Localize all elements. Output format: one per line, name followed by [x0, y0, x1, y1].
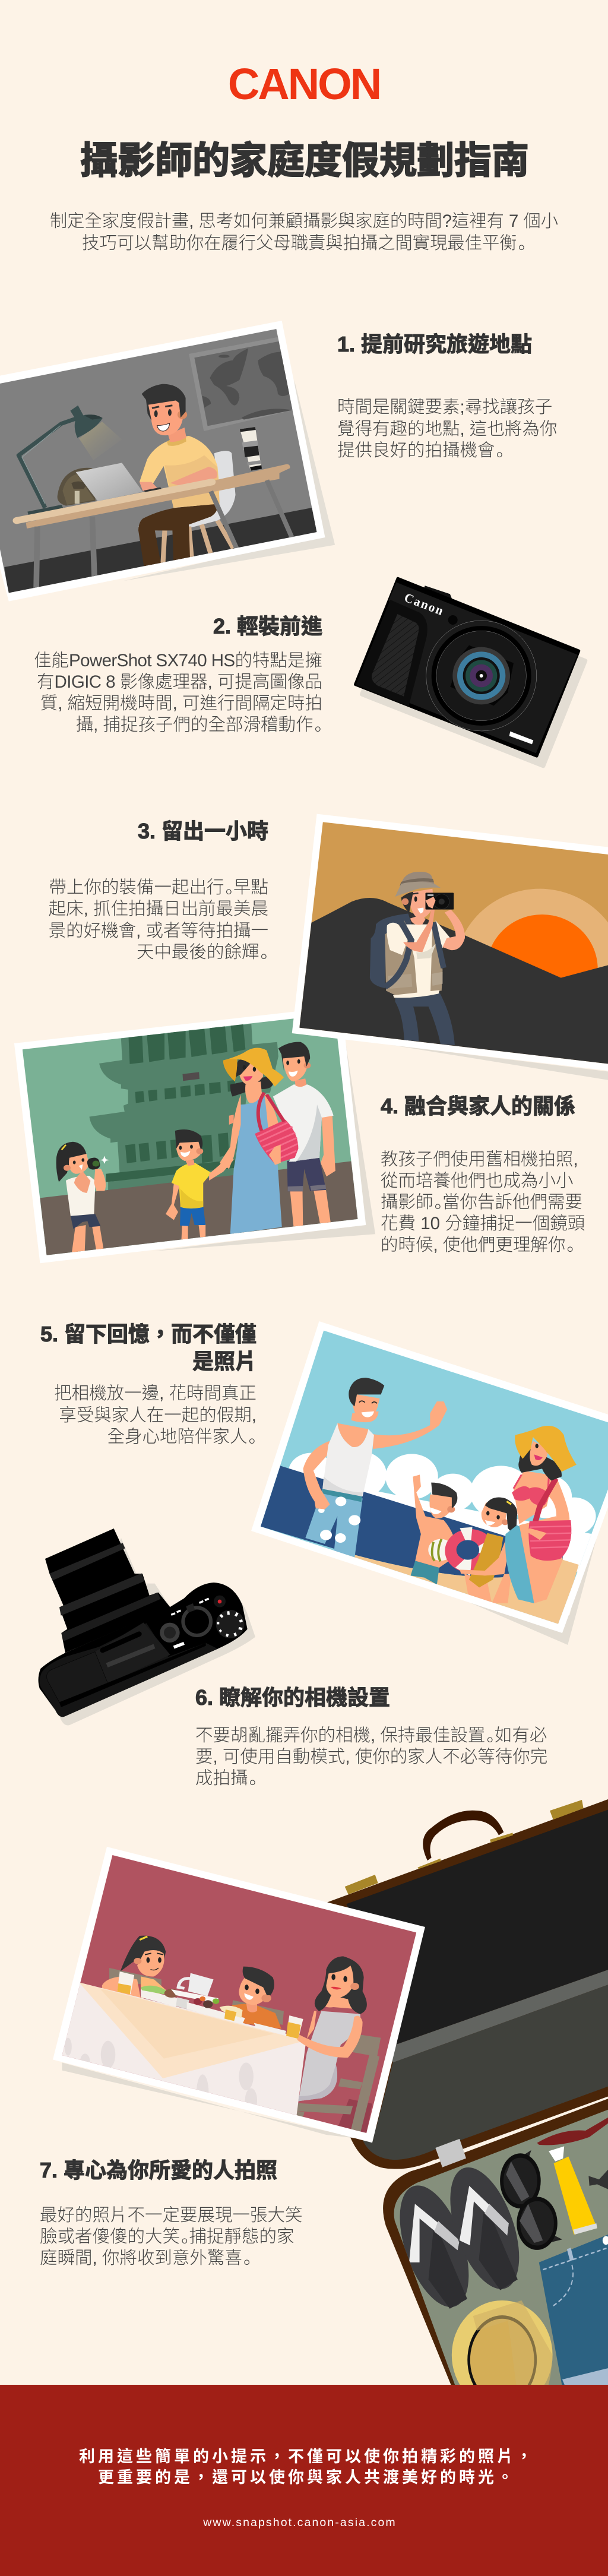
intro text: 技巧可以幫助你在履行父母職責與拍攝之間實現最佳平衡。 [82, 233, 522, 258]
suitcase latches [345, 1800, 584, 1894]
footer message [79, 2448, 535, 2486]
sun [464, 888, 608, 978]
footer message: 利用這些簡單的小提示，不僅可以使你拍精彩的照片， [79, 2448, 535, 2466]
intro text: 制定全家度假計畫, 思考如何兼顧攝影與家庭的時間?這裡有 7 個小 [50, 211, 558, 231]
step 5 text: 享受與家人在一起的假期, [59, 1405, 256, 1425]
intro text [50, 211, 558, 258]
step 4 text: 從而培養他們也成為小小 [381, 1171, 574, 1191]
girl at table [102, 1936, 167, 1999]
father waving [303, 1378, 447, 1558]
step 7 text: 庭瞬間, 你將收到意外驚喜。 [40, 2248, 247, 2273]
step 3 text: 天中最後的餘輝。 [137, 942, 264, 967]
jeans [539, 2235, 608, 2387]
sunglasses [502, 2150, 562, 2248]
chair [138, 451, 236, 563]
step 1 text: 時間是關鍵要素;尋找讓孩子 [337, 397, 552, 417]
step 7 text [40, 2205, 303, 2273]
mother at table [297, 1956, 367, 2101]
step 2 text: 佳能PowerShot SX740 HS的特點是擁 [34, 651, 322, 670]
scarf strap [537, 2118, 608, 2145]
camera dial [216, 1610, 245, 1638]
step 1 text [337, 397, 557, 466]
laptop [76, 463, 162, 501]
suitcase handle [423, 1811, 504, 1860]
step 3 text: 景的好機會, 或者等待拍攝一 [49, 921, 268, 941]
step 4 text: 花費 10 分鐘捕捉一個鏡頭 [381, 1214, 585, 1233]
swim ring [445, 1527, 487, 1576]
step 5 text: 全身心地陪伴家人。 [107, 1427, 252, 1452]
step 2 text: 質, 縮短開機時間, 可進行間隔定時拍 [40, 694, 322, 713]
desk [17, 464, 292, 590]
step 7 text: 最好的照片不一定要展現一張大笑 [40, 2205, 303, 2225]
step 1 heading: 1. 提前研究旅遊地點 [337, 332, 532, 356]
step 3 heading: 3. 留出一小時 [138, 819, 268, 843]
step 5 heading: 是照片 [192, 1349, 256, 1374]
desk lamp [18, 406, 122, 515]
step 5 text [54, 1384, 256, 1452]
straw hat [451, 2300, 553, 2385]
step 5 heading: 5. 留下回憶，而不僅僅 [40, 1322, 256, 1346]
open suitcase: lower tray with packed items [383, 2094, 608, 2411]
camera grip [372, 614, 419, 697]
camera brand: Canon [403, 590, 445, 618]
step 6 heading: 6. 瞭解你的相機設置 [195, 1685, 390, 1710]
camera lens [426, 621, 537, 731]
mountains [291, 898, 608, 1075]
step 6 text: 成拍攝。 [195, 1768, 253, 1793]
footer band [0, 2385, 608, 2576]
step 2 heading: 2. 輕裝前進 [213, 614, 322, 638]
photo 3: photographer at sunrise [291, 814, 608, 1082]
footer message: 更重要的是，還可以使你與家人共渡美好的時光。 [98, 2469, 516, 2486]
step 1 text: 提供良好的拍攝機會。 [337, 441, 500, 466]
photographer [370, 872, 465, 1045]
step 1 text: 覺得有趣的地點, 這也將為你 [337, 419, 557, 438]
boy at table [232, 1967, 284, 2029]
step 4 heading: 4. 融合與家人的關係 [381, 1094, 575, 1118]
table cloth [62, 1982, 306, 2115]
step 5 heading [40, 1322, 256, 1374]
step 4 text: 的時候, 使他們更理解你。 [381, 1235, 571, 1260]
step 6 text: 要, 可使用自動模式, 使你的家人不必等待你完 [195, 1747, 547, 1767]
lens on desk [240, 427, 262, 471]
camera bag [58, 468, 96, 506]
photo 7: family dinner [48, 1845, 435, 2143]
step 2 text: 攝, 捕捉孩子們的全部滑稽動作。 [76, 715, 318, 740]
mother with towel and bag [505, 1426, 577, 1603]
mother with hat and bag [220, 1048, 298, 1234]
wall map [189, 336, 299, 431]
logo: CANON: CANON [228, 59, 380, 109]
step 6 text: 不要胡亂擺弄你的相機, 保持最佳設置。如有必 [195, 1726, 547, 1751]
step 4 text: 攝影師。當你告訴他們需要 [381, 1192, 582, 1217]
footer url: www.snapshot.canon-asia.com [203, 2516, 397, 2529]
dining chair [296, 2033, 381, 2134]
temple [89, 1024, 278, 1191]
plug [588, 2170, 608, 2189]
food and jug [141, 1973, 303, 2039]
man at laptop [138, 384, 220, 566]
compact camera, front view [355, 578, 585, 766]
step 2 text [34, 651, 322, 740]
step 6 text [195, 1726, 547, 1793]
boy with ball [411, 1474, 457, 1584]
step 4 text: 教孩子們使用舊相機拍照, [381, 1150, 578, 1169]
flip-flops [400, 2167, 519, 2309]
step 3 text: 起床, 抓住拍攝日出前最美晨 [49, 899, 268, 919]
step 2 text: 有DIGIC 8 影像處理器, 可提高圖像品 [37, 672, 322, 692]
open suitcase: lid [327, 1799, 608, 2170]
sunscreen tube [549, 2146, 597, 2235]
boy in yellow shirt [166, 1129, 234, 1240]
step 3 text [49, 878, 268, 967]
step 4 text [381, 1150, 585, 1260]
sea [261, 1466, 563, 1578]
step 7 text: 臉或者傻傻的大笑。捕捉靜態的家 [40, 2227, 294, 2252]
girl [460, 1498, 517, 1603]
table top [79, 1982, 305, 2078]
sand [341, 1555, 579, 1627]
father [273, 1042, 335, 1227]
step 3 text: 帶上你的裝備一起出行。早點 [49, 878, 268, 903]
clouds [277, 1451, 596, 1575]
step 5 text: 把相機放一邊, 花時間真正 [54, 1384, 256, 1403]
girl with camera [56, 1142, 109, 1253]
photo 4: family sightseeing at temple [12, 1007, 375, 1267]
step 7 heading: 7. 專心為你所愛的人拍照 [40, 2158, 277, 2182]
compact camera, top view [39, 1528, 255, 1726]
title: 攝影師的家庭度假規劃指南 [80, 140, 529, 182]
photo 1: man planning trip at desk [0, 321, 335, 602]
photo 5: family on the beach [249, 1318, 608, 1645]
